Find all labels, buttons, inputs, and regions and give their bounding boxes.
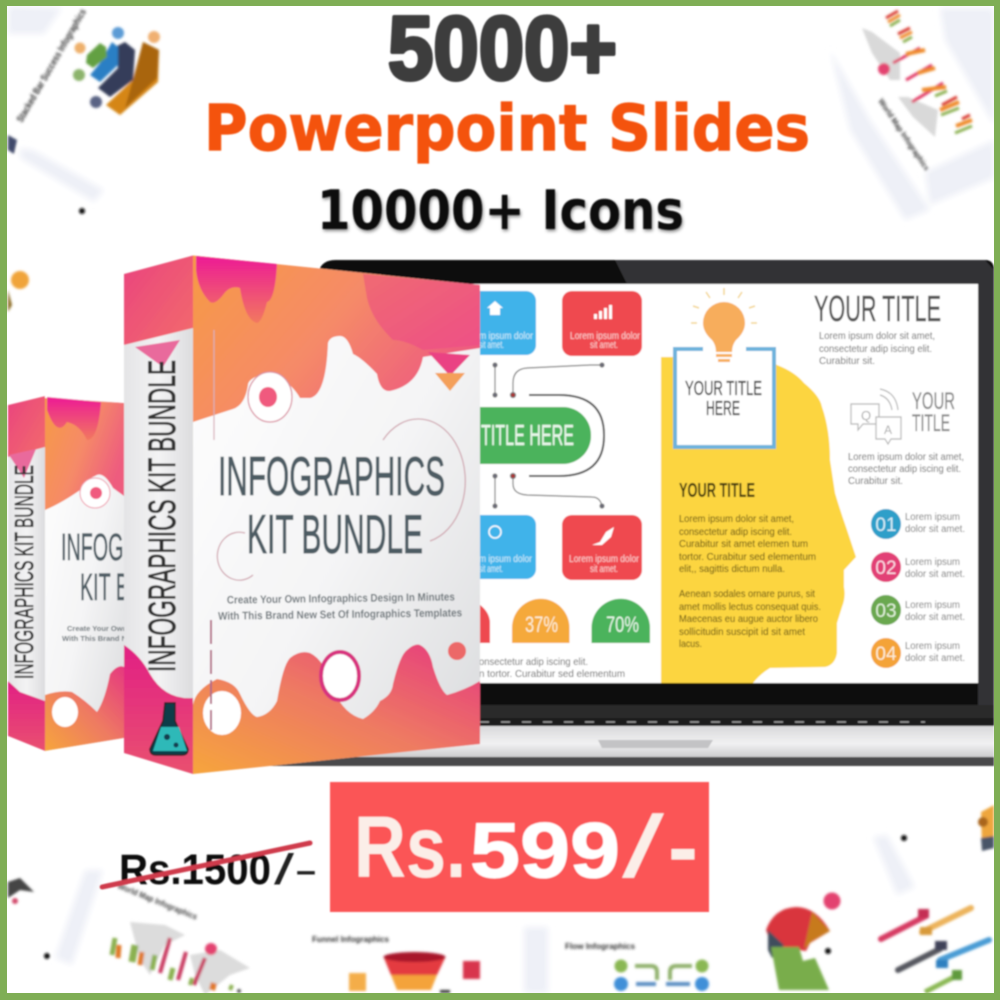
heading: 10000+ Icons: 10000+ Icons [317,179,684,242]
list item 02 [871,552,965,582]
right paragraph 2: Lorem ipsum dolor sit amet, [848,451,964,463]
pink drip right [363,274,480,350]
bottom wave [193,645,480,774]
list item 03: 03 [875,601,897,622]
price box: Rs. [354,799,466,896]
laptop [180,260,994,766]
yellow panel body text: lacus. [679,638,702,650]
small box front [45,396,124,751]
left caption: n tortor. Curabitur sed elementum [479,668,625,680]
yellow panel body text: Curabitur sit amet elemen tum [679,538,808,550]
small product box [7,395,126,752]
heading: YOUR TITLE small [912,388,955,437]
thumbnail: world map top right: World Map Infographics [876,97,932,173]
small box tagline: Create Your Own [67,624,128,633]
main box spine title: INFOGRAPHICS KIT BUNDLE [142,360,184,672]
yellow panel heading: YOUR TITLE [679,480,755,502]
green title pill [440,407,591,464]
yellow panel body text: elit,, sagittis dictum nulla. [679,563,785,575]
egg ring [248,372,292,422]
main box front [193,256,480,774]
price box [330,782,709,912]
list item 03: dolor sit amet. [905,612,965,623]
small box title: INFOGRAPHICS [61,527,211,569]
screen left: blue tile top [462,291,536,355]
screen left: red tile bottom: Lorem ipsum dolor [569,553,639,565]
percent badge 37%: 37% [525,612,558,637]
price box: / [622,797,665,896]
list item 01: Lorem ipsum [905,512,960,523]
title frame: HERE [706,398,740,420]
triangles [428,352,470,391]
list item 02: dolor sit amet. [905,569,965,580]
yellow panel body text: tortor. Curabitur sed elementum [679,551,816,563]
white ring [203,691,241,735]
small product box: With This Brand New [62,634,137,643]
list item 04: dolor sit amet. [905,653,965,664]
screen left: red tile bottom: sit amet. [590,563,618,575]
price box: 599 [470,806,620,894]
thumbnail: flow [565,941,709,991]
right paragraph 1: Lorem ipsum dolor sit amet, [819,330,935,342]
right paragraph 2: Curabitur sit. [848,475,903,487]
percent badge red [425,598,490,643]
screen left: red tile top: sit amet. [590,339,618,351]
thumbnail: flow: Flow Infographics [565,941,635,951]
laptop base [180,718,994,766]
thumbnail: world map top right [862,11,972,173]
right paragraph 1 [819,330,935,367]
small product box: KIT BUNDLE [80,567,196,609]
heading: Powerpoint Slides: Powerpoint Slides [204,92,810,165]
left caption [479,656,625,680]
list item 03 [871,595,965,625]
laptop bezel [320,260,994,718]
thumbnail: stacked bar top left [8,7,160,154]
screen left: blue tile bottom [462,515,536,579]
small box spine [8,447,46,702]
main box spine [124,256,193,774]
main box tagline: Create Your Own Infographics Design In Minutes [227,591,455,607]
screen [470,284,978,683]
screen left: blue tile bottom: m ipsum dolor [479,553,532,565]
screen left: blue tile top: m ipsum dolor [479,330,533,342]
percent badge 37% [512,599,570,643]
old price: /- [274,846,318,894]
decorative circles [214,330,465,580]
connectors [493,363,604,508]
title frame: YOUR TITLE [685,378,762,400]
screen left: red tile top: Lorem ipsum dolor [570,330,640,342]
strike-through line [102,843,310,887]
dash line [210,620,212,730]
thumbnail: world map bottom left [112,881,250,995]
price box: - [668,797,698,896]
yellow panel body text: amet mollis lectus consequat quis. [679,601,821,613]
yellow panel body text: Maecenas eu augue auctor libero [679,613,818,625]
list item 04: 04 [875,644,897,665]
thumbnail: left edge pieces [8,271,50,959]
yellow panel body text: sollicitudin suscipit id sit amet [679,626,805,638]
title frame [675,349,774,447]
small box bottom wave [45,666,124,751]
screen left: red tile top [562,291,642,356]
thumbnail: world map bottom left: World Map Infographics [116,881,199,922]
thumbnail: puzzle and arrows bottom right [766,805,994,992]
right paragraph 1: Curabitur sit. [819,355,875,367]
list item 04 [871,638,965,668]
main box tagline [218,591,462,623]
dot [79,208,85,214]
yellow panel body text: Lorem ipsum dolor sit amet, [679,513,794,525]
right paragraph 1: consectetur adip iscing elit. [819,343,932,355]
icon: Q and A speech bubbles: Q [861,408,871,423]
percent badge 70% [592,599,650,643]
right paragraph 2 [848,451,964,487]
icon: flask logo [150,703,188,755]
magenta ring [321,652,359,700]
main box title: INFOGRAPHICS [218,445,445,507]
heading: YOUR TITLE small: YOUR [912,388,955,415]
main box title [218,445,445,565]
percent badge 70%: 70% [606,612,639,637]
list item 01: dolor sit amet. [905,524,965,535]
icon: Q and A speech bubbles [851,389,901,444]
yellow head silhouette [661,357,856,683]
screen left: red tile bottom [562,515,642,580]
right paragraph 2: consectetur adip iscing elit. [848,463,961,475]
list item 02: Lorem ipsum [905,557,960,568]
old price: Rs.1500 [119,846,271,894]
icon: Q and A speech bubbles: A [884,423,892,437]
list item 01: 01 [875,515,897,536]
screen left: blue tile bottom: sit amet. [479,563,503,575]
screen left: blue tile top: sit amet. [479,339,504,351]
yellow panel body text: consectetur adip iscing elit. [679,526,792,538]
green title pill: TITLE HERE [481,420,574,452]
yellow panel body text [679,513,821,650]
dot [448,642,466,660]
main box tagline: With This Brand New Set Of Infographics Templates [218,607,462,623]
icon: light bulb [691,288,757,362]
main product box [124,256,480,774]
list item 01 [871,509,965,539]
main box title: KIT BUNDLE [247,503,423,565]
left caption: onsectetur adip iscing elit. [479,656,588,668]
list item 03: Lorem ipsum [905,600,960,611]
small box spine title: INFOGRAPHICS KIT BUNDLE [9,465,39,679]
thumbnail: funnel: Funnel Infographics [312,934,389,944]
yellow panel body text: Aenean sodales ornare purus, sit [679,588,815,600]
magenta drip left [196,256,277,323]
heading: YOUR TITLE small: TITLE [912,410,950,437]
top wave [193,256,480,422]
heading: 5000+: 5000+ [388,0,617,99]
list item 04: Lorem ipsum [905,641,960,652]
thumbnail: funnel [312,934,480,993]
list item 02: 02 [875,558,897,579]
